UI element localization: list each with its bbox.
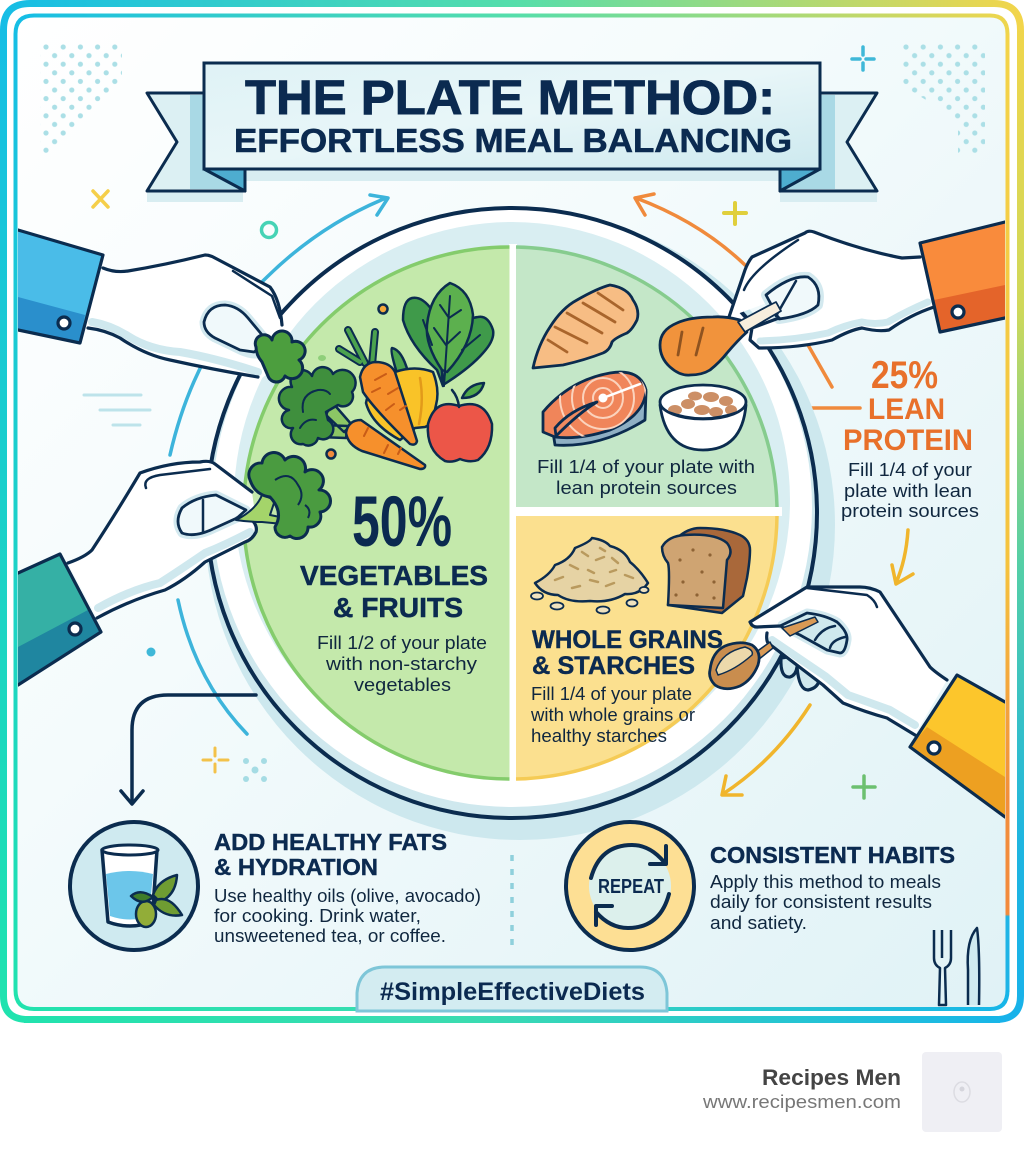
arrow: dark elbow arrow — [121, 695, 256, 804]
text block: protein in plate: Fill 1/4 of your plate with — [537, 457, 755, 477]
text block: vegetables — [300, 483, 488, 695]
decorative food dots — [318, 304, 388, 458]
text block: vegetables: with non-starchy — [325, 654, 477, 674]
segment: protein quarter — [516, 246, 778, 507]
segment: grains quarter — [516, 516, 778, 780]
food: grains — [531, 528, 750, 614]
plate rim line — [207, 208, 817, 818]
text block: healthy fats: & HYDRATION — [214, 854, 378, 880]
plate — [205, 207, 835, 840]
footer brand: Recipes Men — [762, 1065, 901, 1090]
segment: vegetables half — [242, 246, 510, 780]
text block: vegetables: 50% — [352, 483, 452, 562]
banner title line 2: EFFORTLESS MEAL BALANCING — [234, 122, 792, 159]
hashtag tab: #SimpleEffectiveDiets — [380, 978, 645, 1006]
callout: 25% lean protein: 25% — [871, 354, 938, 397]
footer logo box — [922, 1052, 1002, 1132]
hands and sleeves — [18, 222, 1005, 817]
icon: chicken drumstick — [660, 317, 747, 375]
title banner — [147, 63, 877, 202]
plate rim base — [207, 208, 817, 818]
icon: fork and knife — [934, 928, 979, 1005]
callout: 25% lean protein — [841, 354, 979, 521]
decorative halftone dots right — [902, 42, 985, 155]
divider dashed — [510, 855, 514, 945]
text block: consistent habits — [710, 842, 955, 933]
text block: vegetables: & FRUITS — [333, 592, 463, 623]
callout: 25% lean protein: plate with lean — [844, 481, 972, 501]
text block: grains: & STARCHES — [532, 652, 695, 680]
icon: carrot two — [346, 420, 425, 469]
icon: salmon steak — [542, 370, 648, 447]
icon: bowl of beans — [660, 385, 746, 450]
hand: top left with sleeve — [18, 230, 298, 378]
plate shadow band — [205, 210, 835, 840]
icon: carrot greens and pepper — [339, 330, 437, 440]
text block: protein in plate — [537, 457, 755, 498]
plate inner well — [234, 222, 790, 778]
icon: repeat cycle: REPEAT — [598, 876, 664, 898]
text block: protein in plate: lean protein sources — [556, 478, 737, 498]
hashtag tab — [357, 967, 667, 1011]
icon: repeat cycle — [566, 822, 694, 950]
banner title line 1: THE PLATE METHOD: — [245, 72, 775, 125]
text block: consistent habits: daily for consistent results — [710, 892, 932, 912]
icon: drumstick bone — [738, 302, 781, 332]
icon: broccoli held lower left — [236, 453, 331, 539]
text block: vegetables: VEGETABLES — [300, 560, 488, 591]
icon: rice pile — [531, 538, 648, 614]
text block: grains: healthy starches — [531, 726, 667, 746]
text block: healthy fats: Use healthy oils (olive, avocado) — [214, 886, 481, 906]
text block: healthy fats — [214, 829, 481, 946]
callout: 25% lean protein: LEAN — [868, 393, 945, 426]
icon: broccoli floret held — [255, 331, 305, 382]
text block: consistent habits: Apply this method to meals — [710, 872, 941, 892]
food: vegetables and fruits — [279, 283, 493, 469]
callout: 25% lean protein: PROTEIN — [843, 424, 973, 457]
hand: top right with sleeve — [729, 222, 1005, 348]
arrow: blue arc top left — [170, 195, 388, 734]
icon: spinach — [403, 283, 493, 386]
hand: bottom right with sleeve — [750, 587, 1005, 817]
text block: grains: Fill 1/4 of your plate — [531, 684, 692, 704]
text block: grains: WHOLE GRAINS — [532, 626, 723, 654]
segment divider — [509, 244, 782, 782]
text block: consistent habits: and satiety. — [710, 913, 807, 933]
icon: chicken breast — [533, 285, 638, 368]
text block: grains: with whole grains or — [530, 705, 695, 725]
footer brand — [702, 1065, 901, 1112]
footer brand: www.recipesmen.com — [702, 1092, 901, 1112]
hand: lower left with sleeve — [18, 461, 257, 685]
ribbon right tail — [780, 93, 877, 191]
decorative symbols — [84, 47, 875, 798]
icon: broccoli center — [279, 367, 356, 446]
decorative halftone dots left — [40, 42, 122, 155]
ribbon left tail — [147, 93, 245, 191]
banner drop shadows — [147, 169, 877, 202]
callout: 25% lean protein: Fill 1/4 of your — [848, 460, 972, 480]
text block: healthy fats: ADD HEALTHY FATS — [214, 829, 447, 855]
plate white surface — [212, 207, 812, 807]
text block: vegetables: vegetables — [354, 675, 451, 695]
icon: bread loaf — [662, 528, 750, 613]
icon: water glass with olives — [70, 822, 198, 950]
food: protein — [533, 285, 747, 450]
icon: carrot one — [360, 362, 417, 445]
arrow: yellow protein arrow — [722, 530, 913, 795]
icon: apple — [428, 383, 492, 462]
icon: measuring spoon with grains — [710, 642, 773, 689]
callout: 25% lean protein: protein sources — [841, 501, 979, 521]
text block: consistent habits: CONSISTENT HABITS — [710, 842, 955, 868]
text block: grains — [530, 626, 723, 746]
banner panel — [204, 63, 820, 169]
text block: healthy fats: unsweetened tea, or coffee. — [214, 926, 446, 946]
text block: healthy fats: for cooking. Drink water, — [214, 906, 421, 926]
arrow: orange arc top right — [635, 194, 860, 408]
text block: vegetables: Fill 1/2 of your plate — [317, 633, 487, 653]
